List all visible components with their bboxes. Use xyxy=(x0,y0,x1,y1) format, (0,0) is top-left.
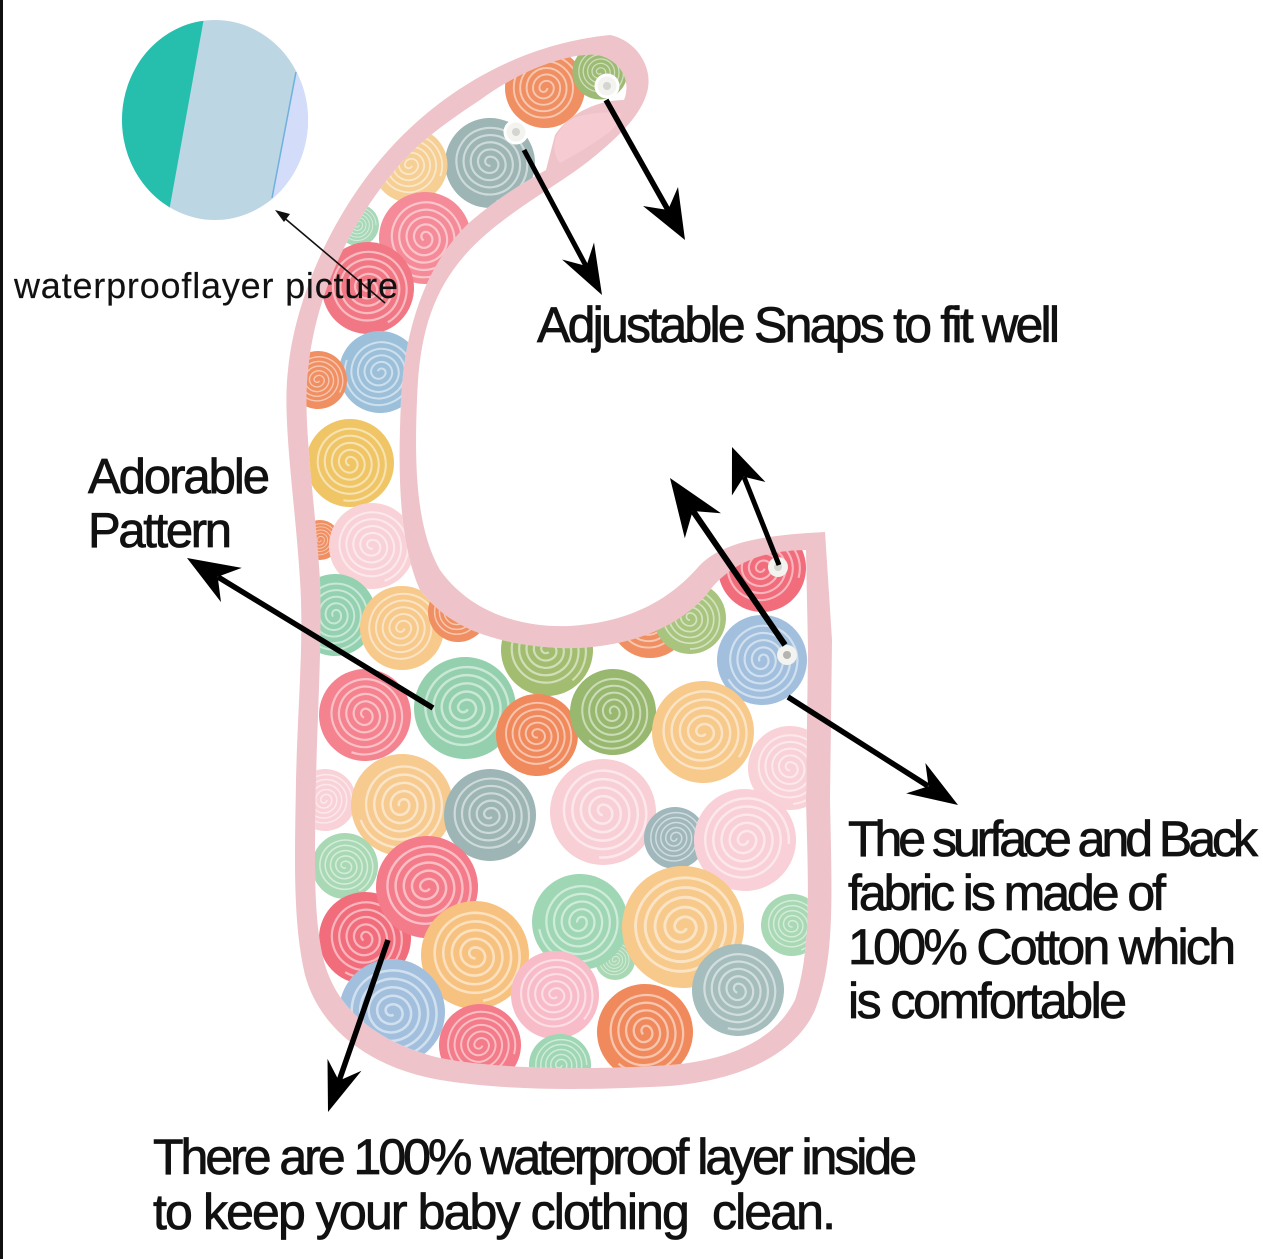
arrow: inner snap xyxy=(524,150,602,295)
arrow: lower side snap xyxy=(670,478,785,645)
text: waterproof layer description: to keep your baby clothing clean. xyxy=(153,1184,836,1240)
text: adorable pattern xyxy=(88,450,270,558)
bib inner white fabric xyxy=(306,55,808,1068)
strap pink underside lobe xyxy=(554,112,621,163)
label: waterproof layer picture: waterprooflayer picture xyxy=(13,265,398,306)
arrow: waterproof layer callout xyxy=(328,940,388,1112)
arrow: outer snap xyxy=(606,100,685,240)
arrow: waterproof picture pointer xyxy=(275,210,385,303)
snap: side lower xyxy=(777,645,797,665)
arrow: fabric callout xyxy=(788,697,958,805)
text: fabric description xyxy=(848,811,1259,1029)
text: fabric description: is comfortable xyxy=(848,973,1127,1029)
snap: side upper xyxy=(768,557,788,577)
bib pink binding xyxy=(286,35,832,1089)
snap: strap outer xyxy=(596,75,618,97)
text: waterproof layer description: There are 100% waterproof layer inside xyxy=(153,1129,917,1185)
text: fabric description: 100% Cotton which xyxy=(848,919,1236,975)
snap: strap inner xyxy=(505,121,527,143)
waterproof layer picture xyxy=(122,20,308,220)
text: fabric description: The surface and Back xyxy=(848,811,1259,867)
page edge bar xyxy=(0,0,3,1259)
text: adorable pattern: Adorable xyxy=(88,450,270,504)
arrow: upper side snap xyxy=(732,447,779,565)
text: adorable pattern: Pattern xyxy=(88,504,232,558)
arrow: pattern callout xyxy=(187,558,433,708)
heading: adjustable snaps: Adjustable Snaps to fit well xyxy=(537,297,1060,353)
text: waterproof layer description xyxy=(153,1129,917,1240)
bib xyxy=(277,33,836,1100)
text: fabric description: fabric is made of xyxy=(848,865,1166,921)
flower pattern xyxy=(277,33,836,1100)
